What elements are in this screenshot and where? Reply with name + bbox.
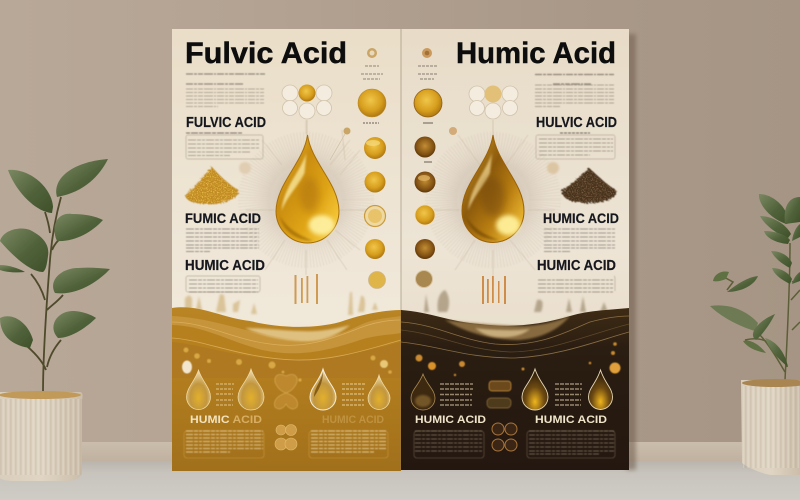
- hexagon concept cluster: [282, 84, 332, 135]
- text block: intro: [186, 74, 265, 106]
- text box lower right: [309, 431, 388, 458]
- text box lower left: [414, 431, 484, 458]
- coin column: [414, 48, 457, 288]
- text box: fulvic description: [186, 133, 263, 159]
- heading: HUMIC ACID: HUMIC ACID: [543, 210, 619, 226]
- radiating ticks around drop: [246, 120, 366, 275]
- icon: lower right drop 3: [588, 370, 612, 410]
- central molecule block: [487, 381, 511, 408]
- drop halo: [425, 130, 561, 266]
- icon: lower right drop 1 dark: [411, 374, 435, 410]
- plant: right potted plant: [710, 194, 800, 475]
- hexagon concept cluster: [469, 86, 518, 135]
- chart bars: [482, 276, 506, 304]
- heading: HUMIC ACID second: HUMIC ACID: [537, 258, 616, 274]
- heading: faint ACID lower right: HUMIC ACID: [322, 414, 384, 426]
- icon: lower left drop 3: [310, 369, 336, 410]
- icon: main amber drop: [462, 135, 524, 242]
- text box: second description: [538, 276, 615, 292]
- drop halo: [238, 130, 374, 266]
- icon: lower left drop 1: [186, 370, 210, 410]
- text list beside drop 1: [440, 384, 473, 405]
- heading: FULVIC ACID: FULVIC ACID: [186, 115, 266, 131]
- right stem: [722, 243, 800, 380]
- butterfly molecule diagram: [274, 374, 298, 409]
- heading: FUMIC ACID: FUMIC ACID: [185, 210, 261, 226]
- humic soil pile: [562, 168, 616, 203]
- heading: HUMIC ACID: HUMIC ACID: [185, 258, 265, 274]
- right leaves: [710, 194, 800, 367]
- panel shadow: [626, 34, 636, 470]
- left pot: [0, 391, 83, 481]
- bubbles in soil: [184, 348, 392, 382]
- icon: main gold drop: [276, 135, 339, 243]
- seal icon near pile: [547, 162, 559, 174]
- text list beside drop 2: [216, 384, 234, 405]
- heading: Fulvic Acid: Fulvic Acid: [185, 37, 347, 70]
- plant: left potted plant: [0, 159, 110, 481]
- text block: fumic description: [186, 229, 259, 252]
- panel: fulvic acid poster: [172, 29, 401, 471]
- chart bars: [294, 274, 318, 304]
- panel: humic acid poster: [400, 29, 629, 470]
- left stem: [22, 197, 63, 394]
- text list beside drop 2: [555, 384, 582, 405]
- heading: HUMIC ACID lower right: HUMIC ACID: [535, 414, 607, 426]
- text list beside drop 3: [342, 384, 365, 405]
- icon: lower left drop 4: [368, 375, 390, 410]
- text box: description: [536, 133, 615, 159]
- radiating ticks around drop: [432, 135, 555, 285]
- heading: HULVIC ACID: HULVIC ACID: [536, 115, 617, 131]
- landscape plants strip: [185, 292, 378, 315]
- right pot: [741, 379, 800, 475]
- text box lower left: [184, 431, 264, 458]
- clover diagram: [492, 423, 517, 451]
- clover diagram: [275, 424, 297, 450]
- bubbles in soil: [416, 342, 620, 376]
- text box lower right: [527, 431, 615, 458]
- left leaves: [0, 159, 110, 348]
- landscape plants strip: [424, 290, 608, 312]
- text block: intro: [535, 74, 615, 106]
- heading: HUMIC ACID lower left: HUMIC ACID: [415, 414, 486, 426]
- soil layers: [172, 307, 401, 471]
- heading: HUMIC ACID lower left: HUMIC ACID: [190, 414, 262, 426]
- icon: lower right drop 2: [522, 369, 548, 410]
- small seal icon near powder: [239, 162, 251, 174]
- heading: Humic Acid: Humic Acid: [456, 37, 616, 70]
- fulvic powder pile: [185, 167, 239, 204]
- text block: humic description: [544, 229, 615, 252]
- baseboard: [0, 442, 800, 462]
- coin column: [330, 48, 386, 288]
- icon: white flower: [182, 360, 192, 374]
- text box: humic description: [186, 276, 260, 292]
- floor: [0, 461, 800, 500]
- icon: lower left drop 2: [238, 369, 264, 410]
- soil layers: [401, 308, 629, 470]
